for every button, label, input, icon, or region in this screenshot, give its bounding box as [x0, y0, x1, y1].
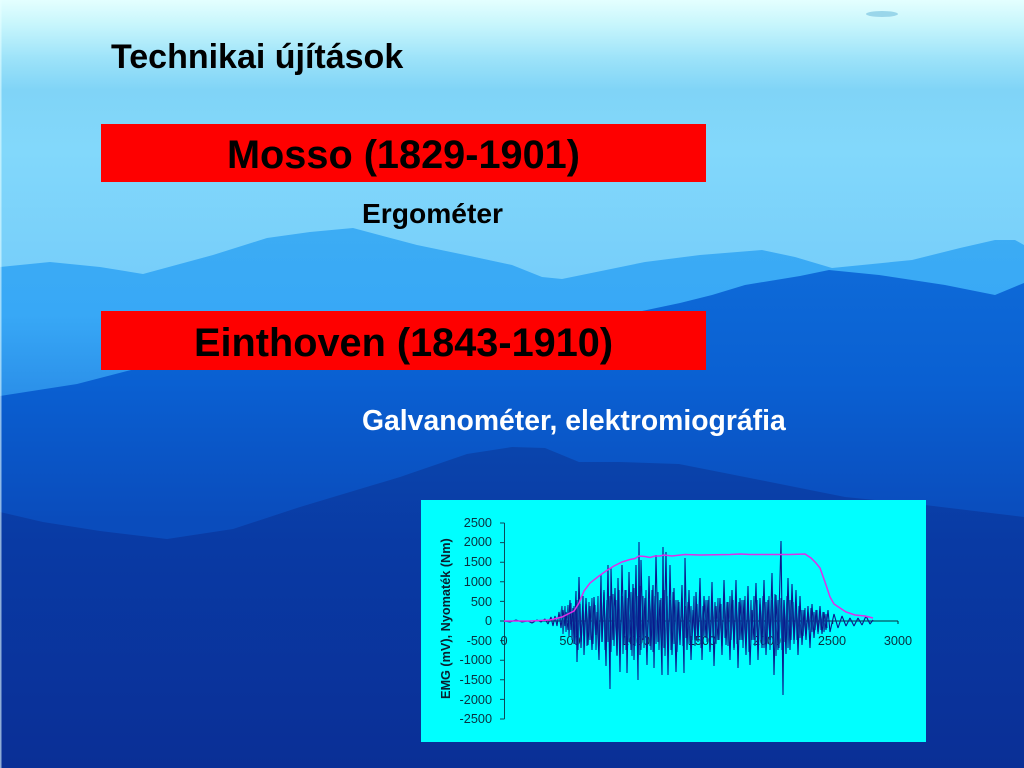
x axis tick labels: 500	[559, 634, 581, 648]
EMG signal band	[560, 586, 827, 660]
label: Galvanométer, elektromiográfia: Galvanométer, elektromiográfia	[362, 405, 786, 437]
x axis tick labels: 1500	[688, 634, 716, 648]
y axis tick labels: -500	[467, 634, 492, 648]
x axis tick labels: 1000	[622, 634, 650, 648]
banner: Mosso	[101, 124, 706, 182]
x axis tick labels	[500, 634, 912, 648]
y axis tick labels: -1000	[460, 653, 492, 667]
y axis tick labels: -2500	[460, 712, 492, 726]
x axis tick labels: 2000	[753, 634, 781, 648]
x axis tick labels: 0	[500, 634, 508, 648]
y axis tick labels: 2500	[464, 516, 492, 530]
y axis title: EMG (mV), Nyomaték (Nm)	[439, 538, 453, 699]
label: Ergométer: Ergométer	[362, 197, 503, 229]
title: Technikai újítások	[111, 38, 403, 76]
y axis tick labels: -2000	[460, 693, 492, 707]
y axis tick labels: 1500	[464, 555, 492, 569]
y axis tick labels: 2000	[464, 535, 492, 549]
y axis tick labels: 0	[485, 614, 492, 628]
EMG signal	[504, 541, 873, 695]
y axis tick labels: 1000	[464, 575, 492, 589]
banner: Einthoven	[101, 311, 706, 370]
panel: EMG chart	[421, 500, 926, 742]
y axis tick labels: 500	[471, 595, 492, 609]
x axis with ticks	[504, 621, 898, 624]
banner: Mosso: Mosso (1829-1901)	[227, 133, 580, 177]
y axis with ticks	[500, 523, 504, 719]
y axis tick labels: -1500	[460, 673, 492, 687]
y axis tick labels	[460, 516, 492, 726]
x axis tick labels: 3000	[884, 634, 912, 648]
banner: Einthoven: Einthoven (1843-1910)	[194, 321, 613, 365]
torque curve	[504, 554, 873, 621]
x axis tick labels: 2500	[818, 634, 846, 648]
